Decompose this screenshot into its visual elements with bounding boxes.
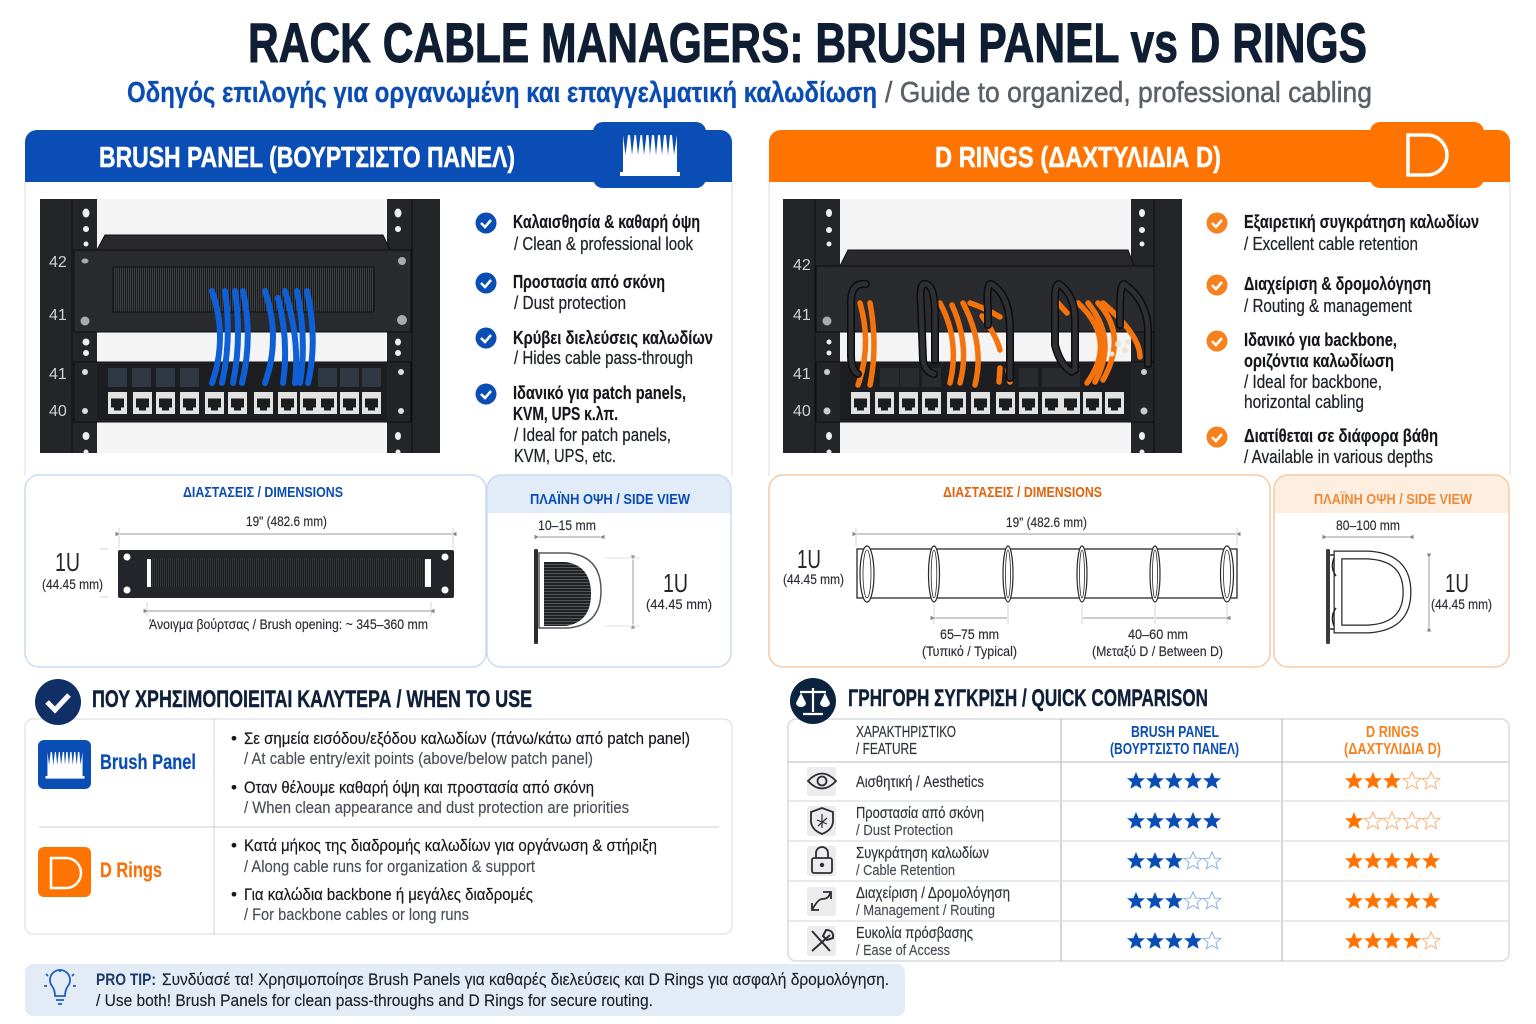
brush panel front drawing xyxy=(118,550,454,598)
rack photo: brush panel: 42 xyxy=(49,254,67,271)
table header: D RINGS xyxy=(1366,724,1419,741)
side view box: brush panel: (44.45 mm) xyxy=(646,596,712,612)
benefit 2: Προστασία από σκόνη xyxy=(513,272,665,292)
panel: d rings xyxy=(769,122,1510,667)
row: ease of access xyxy=(807,925,1440,959)
benefit 4: / Ideal for patch panels, xyxy=(514,425,671,445)
rack photo: brush panel: 41 xyxy=(49,366,67,383)
side view box: brush panel: 10–15 mm xyxy=(538,517,596,533)
panel header: brush panel: BRUSH PANEL (ΒΟΥΡΤΣΙΣΤΟ ΠΑΝΕΛ) xyxy=(99,142,515,174)
benefit 3: οριζόντια καλωδίωση xyxy=(1244,351,1394,372)
benefit 3: / Ideal for backbone, xyxy=(1244,372,1382,392)
dimensions box: brush panel: ΔΙΑΣΤΑΣΕΙΣ / DIMENSIONS xyxy=(183,484,343,501)
blue patch cables xyxy=(212,291,313,383)
icon: D ring xyxy=(1408,135,1447,175)
icon: check badge xyxy=(35,679,81,725)
callout: pro tip: PRO TIP: xyxy=(96,970,156,989)
side profile brush xyxy=(534,549,601,644)
rack photo: d rings: 41 xyxy=(793,366,811,383)
table header: (ΒΟΥΡΤΣΙΣΤΟ ΠΑΝΕΛ) xyxy=(1110,741,1239,758)
benefit 2: / Routing & management xyxy=(1244,296,1412,316)
row: ease of access: / Ease of Access xyxy=(856,942,950,959)
dimensions box: d rings: 1U xyxy=(797,544,821,574)
callout: pro tip: Συνδύασέ τα! Χρησιμοποίησε Brush Panels για καθαρές διελεύσεις και D Rings για ασφαλή δρομολόγηση. xyxy=(162,970,889,989)
dimensions box: brush panel: 1U xyxy=(55,547,80,577)
benefit 3: / Hides cable pass-through xyxy=(514,348,693,368)
row: brush panel: Σε σημεία εισόδου/εξόδου καλωδίων (πάνω/κάτω από patch panel) xyxy=(244,729,690,748)
benefit 4: KVM, UPS κ.λπ. xyxy=(513,404,618,424)
panel header: d rings: D RINGS (ΔΑΧΤΥΛΙΔΙΑ D) xyxy=(935,142,1221,174)
rack photo: d rings xyxy=(783,199,1182,454)
icon: scales badge xyxy=(790,678,836,724)
row: brush panel: Brush Panel xyxy=(100,751,196,774)
row: dust protection xyxy=(807,805,1440,839)
d rings rail drawing xyxy=(857,546,1237,602)
callout: pro tip: / Use both! Brush Panels for clean pass-throughs and D Rings for secure routing. xyxy=(96,991,653,1010)
side view box: d rings xyxy=(1274,475,1509,667)
rack photo: brush panel: 40 xyxy=(49,403,67,420)
table header: ΧΑΡΑΚΤΗΡΙΣΤΙΚΟ xyxy=(856,724,956,741)
side view box: d rings: 1U xyxy=(1445,568,1469,598)
row: management routing: / Management / Routing xyxy=(856,902,995,919)
icon: brush xyxy=(620,135,680,176)
side view box: d rings: (44.45 mm) xyxy=(1431,596,1492,612)
dimensions box: d rings: ΔΙΑΣΤΑΣΕΙΣ / DIMENSIONS xyxy=(943,484,1102,501)
side view box: brush panel: 1U xyxy=(663,568,688,598)
panel header: d rings xyxy=(769,122,1510,188)
row: aesthetics: Αισθητική / Aesthetics xyxy=(856,774,984,791)
benefit 2: Διαχείριση & δρομολόγηση xyxy=(1244,274,1431,294)
benefit 4: KVM, UPS, etc. xyxy=(514,446,616,466)
dimensions box: d rings: (Τυπικό / Typical) xyxy=(922,643,1017,659)
benefit 4: Ιδανικό για patch panels, xyxy=(513,383,686,403)
callout: pro tip xyxy=(25,964,905,1016)
row: d rings: D Rings xyxy=(100,859,162,882)
benefit 1: / Clean & professional look xyxy=(514,234,694,254)
benefit 4 xyxy=(1206,426,1438,467)
dimensions box: brush panel xyxy=(25,475,486,667)
dimensions box: d rings: 40–60 mm xyxy=(1128,626,1188,642)
panel: brush panel xyxy=(25,122,732,667)
row: d rings: • xyxy=(231,836,237,855)
dimensions box: brush panel: (44.45 mm) xyxy=(42,576,103,592)
benefit 1: Καλαισθησία & καθαρή όψη xyxy=(513,212,700,232)
rack photo: d rings: 41 xyxy=(793,307,811,324)
rack photo: d rings: 40 xyxy=(793,403,811,420)
heading: when to use: ΠΟΥ ΧΡΗΣΙΜΟΠΟΙΕΙΤΑΙ ΚΑΛΥΤΕΡΑ / WHEN TO USE xyxy=(92,686,532,713)
dimensions box: d rings: (44.45 mm) xyxy=(783,571,844,587)
benefit 1 xyxy=(1206,212,1479,254)
table header: / FEATURE xyxy=(856,741,917,758)
row: d rings: • xyxy=(231,885,237,904)
benefit 3: Ιδανικό για backbone, xyxy=(1244,330,1397,350)
side view box: brush panel: ΠΛΑΪΝΗ ΟΨΗ / SIDE VIEW xyxy=(530,491,691,508)
row: d rings xyxy=(38,836,657,924)
row: cable retention: / Cable Retention xyxy=(856,862,955,879)
row: cable retention xyxy=(807,845,1440,879)
row: ease of access: Ευκολία πρόσβασης xyxy=(856,925,973,942)
row: d rings: / For backbone cables or long runs xyxy=(244,905,469,924)
row: d rings: / Along cable runs for organization & support xyxy=(244,857,535,876)
row: d rings: Κατά μήκος της διαδρομής καλωδίων για οργάνωση & στήριξη xyxy=(244,836,657,855)
subtitle: / Guide to organized, professional cabling xyxy=(885,77,1372,109)
dimensions box: d rings xyxy=(769,475,1270,667)
row: brush panel xyxy=(38,729,690,817)
panel header: brush panel xyxy=(25,122,732,188)
row: management routing xyxy=(807,885,1440,919)
row: brush panel: Οταν θέλουμε καθαρή όψη και προστασία από σκόνη xyxy=(244,778,594,797)
benefit 3: Κρύβει διελεύσεις καλωδίων xyxy=(513,328,713,348)
side view box: d rings: ΠΛΑΪΝΗ ΟΨΗ / SIDE VIEW xyxy=(1314,491,1473,508)
row: aesthetics xyxy=(807,767,1440,796)
table header: BRUSH PANEL xyxy=(1131,724,1219,741)
side view box: brush panel xyxy=(487,475,731,667)
subtitle: Οδηγός επιλογής για οργανωμένη και επαγγελματική καλωδίωση xyxy=(127,77,877,109)
feature list: d rings xyxy=(1206,212,1479,467)
row: dust protection: / Dust Protection xyxy=(856,822,953,839)
dimensions box: d rings: (Μεταξύ D / Between D) xyxy=(1092,643,1223,659)
panel: quick comparison xyxy=(788,678,1509,961)
row: dust protection: Προστασία από σκόνη xyxy=(856,805,984,822)
orange patch cables xyxy=(858,302,1140,385)
row: brush panel: • xyxy=(231,729,237,748)
dimensions box: d rings: 65–75 mm xyxy=(940,626,999,642)
benefit 2 xyxy=(1206,274,1431,316)
D rings xyxy=(851,284,1148,378)
benefit 2 xyxy=(476,272,665,313)
side profile D ring xyxy=(1326,549,1407,644)
side view box: d rings: 80–100 mm xyxy=(1336,517,1400,533)
row: brush panel: / At cable entry/exit points (above/below patch panel) xyxy=(244,749,593,768)
benefit 4: / Available in various depths xyxy=(1244,447,1433,467)
table header xyxy=(856,724,1441,758)
benefit 4 xyxy=(476,383,686,466)
row: cable retention: Συγκράτηση καλωδίων xyxy=(856,845,989,862)
panel: when to use xyxy=(25,679,732,934)
icon: light bulb xyxy=(44,969,76,1004)
benefit 1: Εξαιρετική συγκράτηση καλωδίων xyxy=(1244,212,1479,233)
rack photo: d rings: 42 xyxy=(793,257,811,274)
rack photo: brush panel: 41 xyxy=(49,307,67,324)
feature list: brush panel xyxy=(476,212,713,466)
benefit 1: / Excellent cable retention xyxy=(1244,234,1418,254)
benefit 3 xyxy=(1206,330,1397,412)
row: management routing: Διαχείριση / Δρομολόγηση xyxy=(856,885,1010,902)
benefit 4: Διατίθεται σε διάφορα βάθη xyxy=(1244,426,1438,446)
row: brush panel: / When clean appearance and dust protection are priorities xyxy=(244,798,629,817)
benefit 3: horizontal cabling xyxy=(1244,392,1364,412)
row: d rings: Για καλώδια backbone ή μεγάλες διαδρομές xyxy=(244,885,533,904)
benefit 2: / Dust protection xyxy=(514,293,626,313)
benefit 1 xyxy=(476,212,700,254)
dimensions box: brush panel: Άνοιγμα βούρτσας / Brush opening: ~ 345–360 mm xyxy=(149,616,428,632)
dimensions box: brush panel: 19" (482.6 mm) xyxy=(246,513,327,529)
table header: (ΔΑΧΤΥΛΙΔΙΑ D) xyxy=(1344,741,1441,758)
row: brush panel: • xyxy=(231,778,237,797)
rack photo: brush panel xyxy=(40,199,440,454)
heading: quick comparison: ΓΡΗΓΟΡΗ ΣΥΓΚΡΙΣΗ / QUICK COMPARISON xyxy=(848,685,1208,712)
benefit 3 xyxy=(476,328,713,368)
dimensions box: d rings: 19" (482.6 mm) xyxy=(1006,514,1087,530)
